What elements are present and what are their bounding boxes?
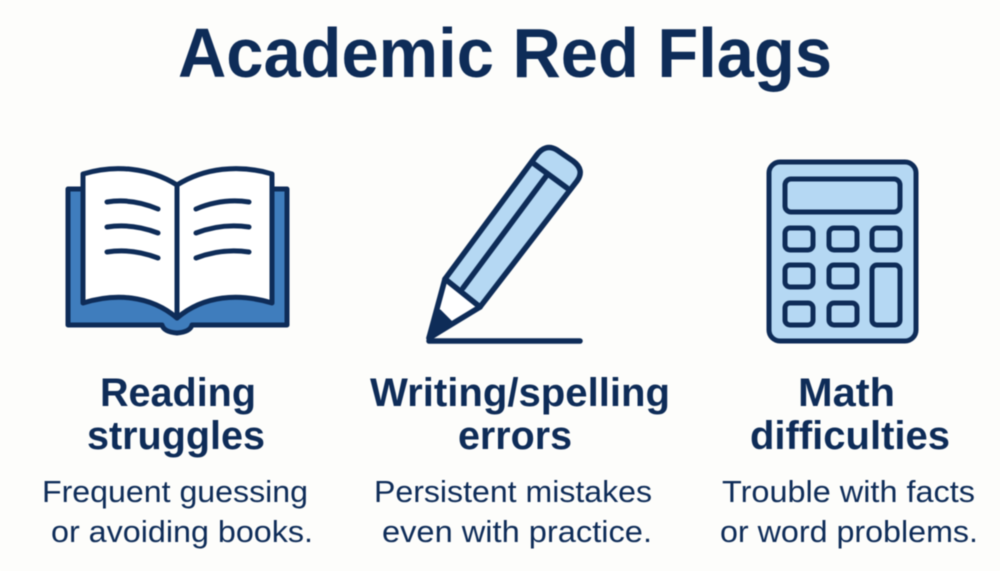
- text: writing description: even with practice.: [382, 514, 652, 549]
- icon: open book: [68, 169, 287, 333]
- heading: math difficulties: Math: [798, 371, 895, 415]
- text: math description: Trouble with facts: [722, 474, 975, 509]
- text: math description: [720, 474, 978, 549]
- text: reading description: Frequent guessing: [42, 474, 308, 509]
- title: Academic Red Flags: [178, 14, 832, 92]
- panel: writing and spelling errors: [370, 148, 670, 549]
- heading: math difficulties: difficulties: [750, 414, 950, 458]
- text: writing description: Persistent mistakes: [374, 474, 652, 509]
- text: reading description: or avoiding books.: [51, 514, 313, 549]
- text: math description: or word problems.: [720, 514, 978, 549]
- heading: reading struggles: Reading: [100, 371, 256, 415]
- heading: writing/spelling errors: Writing/spelling: [370, 371, 670, 415]
- icon: pencil: [429, 148, 580, 341]
- heading: math difficulties: [750, 371, 950, 458]
- panel: reading struggles: [42, 169, 313, 549]
- text: reading description: [42, 474, 313, 549]
- heading: reading struggles: struggles: [87, 414, 265, 458]
- heading: reading struggles: [87, 371, 265, 458]
- heading: writing/spelling errors: [370, 371, 670, 458]
- text: writing description: [374, 474, 652, 549]
- panel: math difficulties: [720, 162, 978, 549]
- heading: writing/spelling errors: errors: [458, 414, 572, 458]
- icon: calculator: [769, 162, 916, 341]
